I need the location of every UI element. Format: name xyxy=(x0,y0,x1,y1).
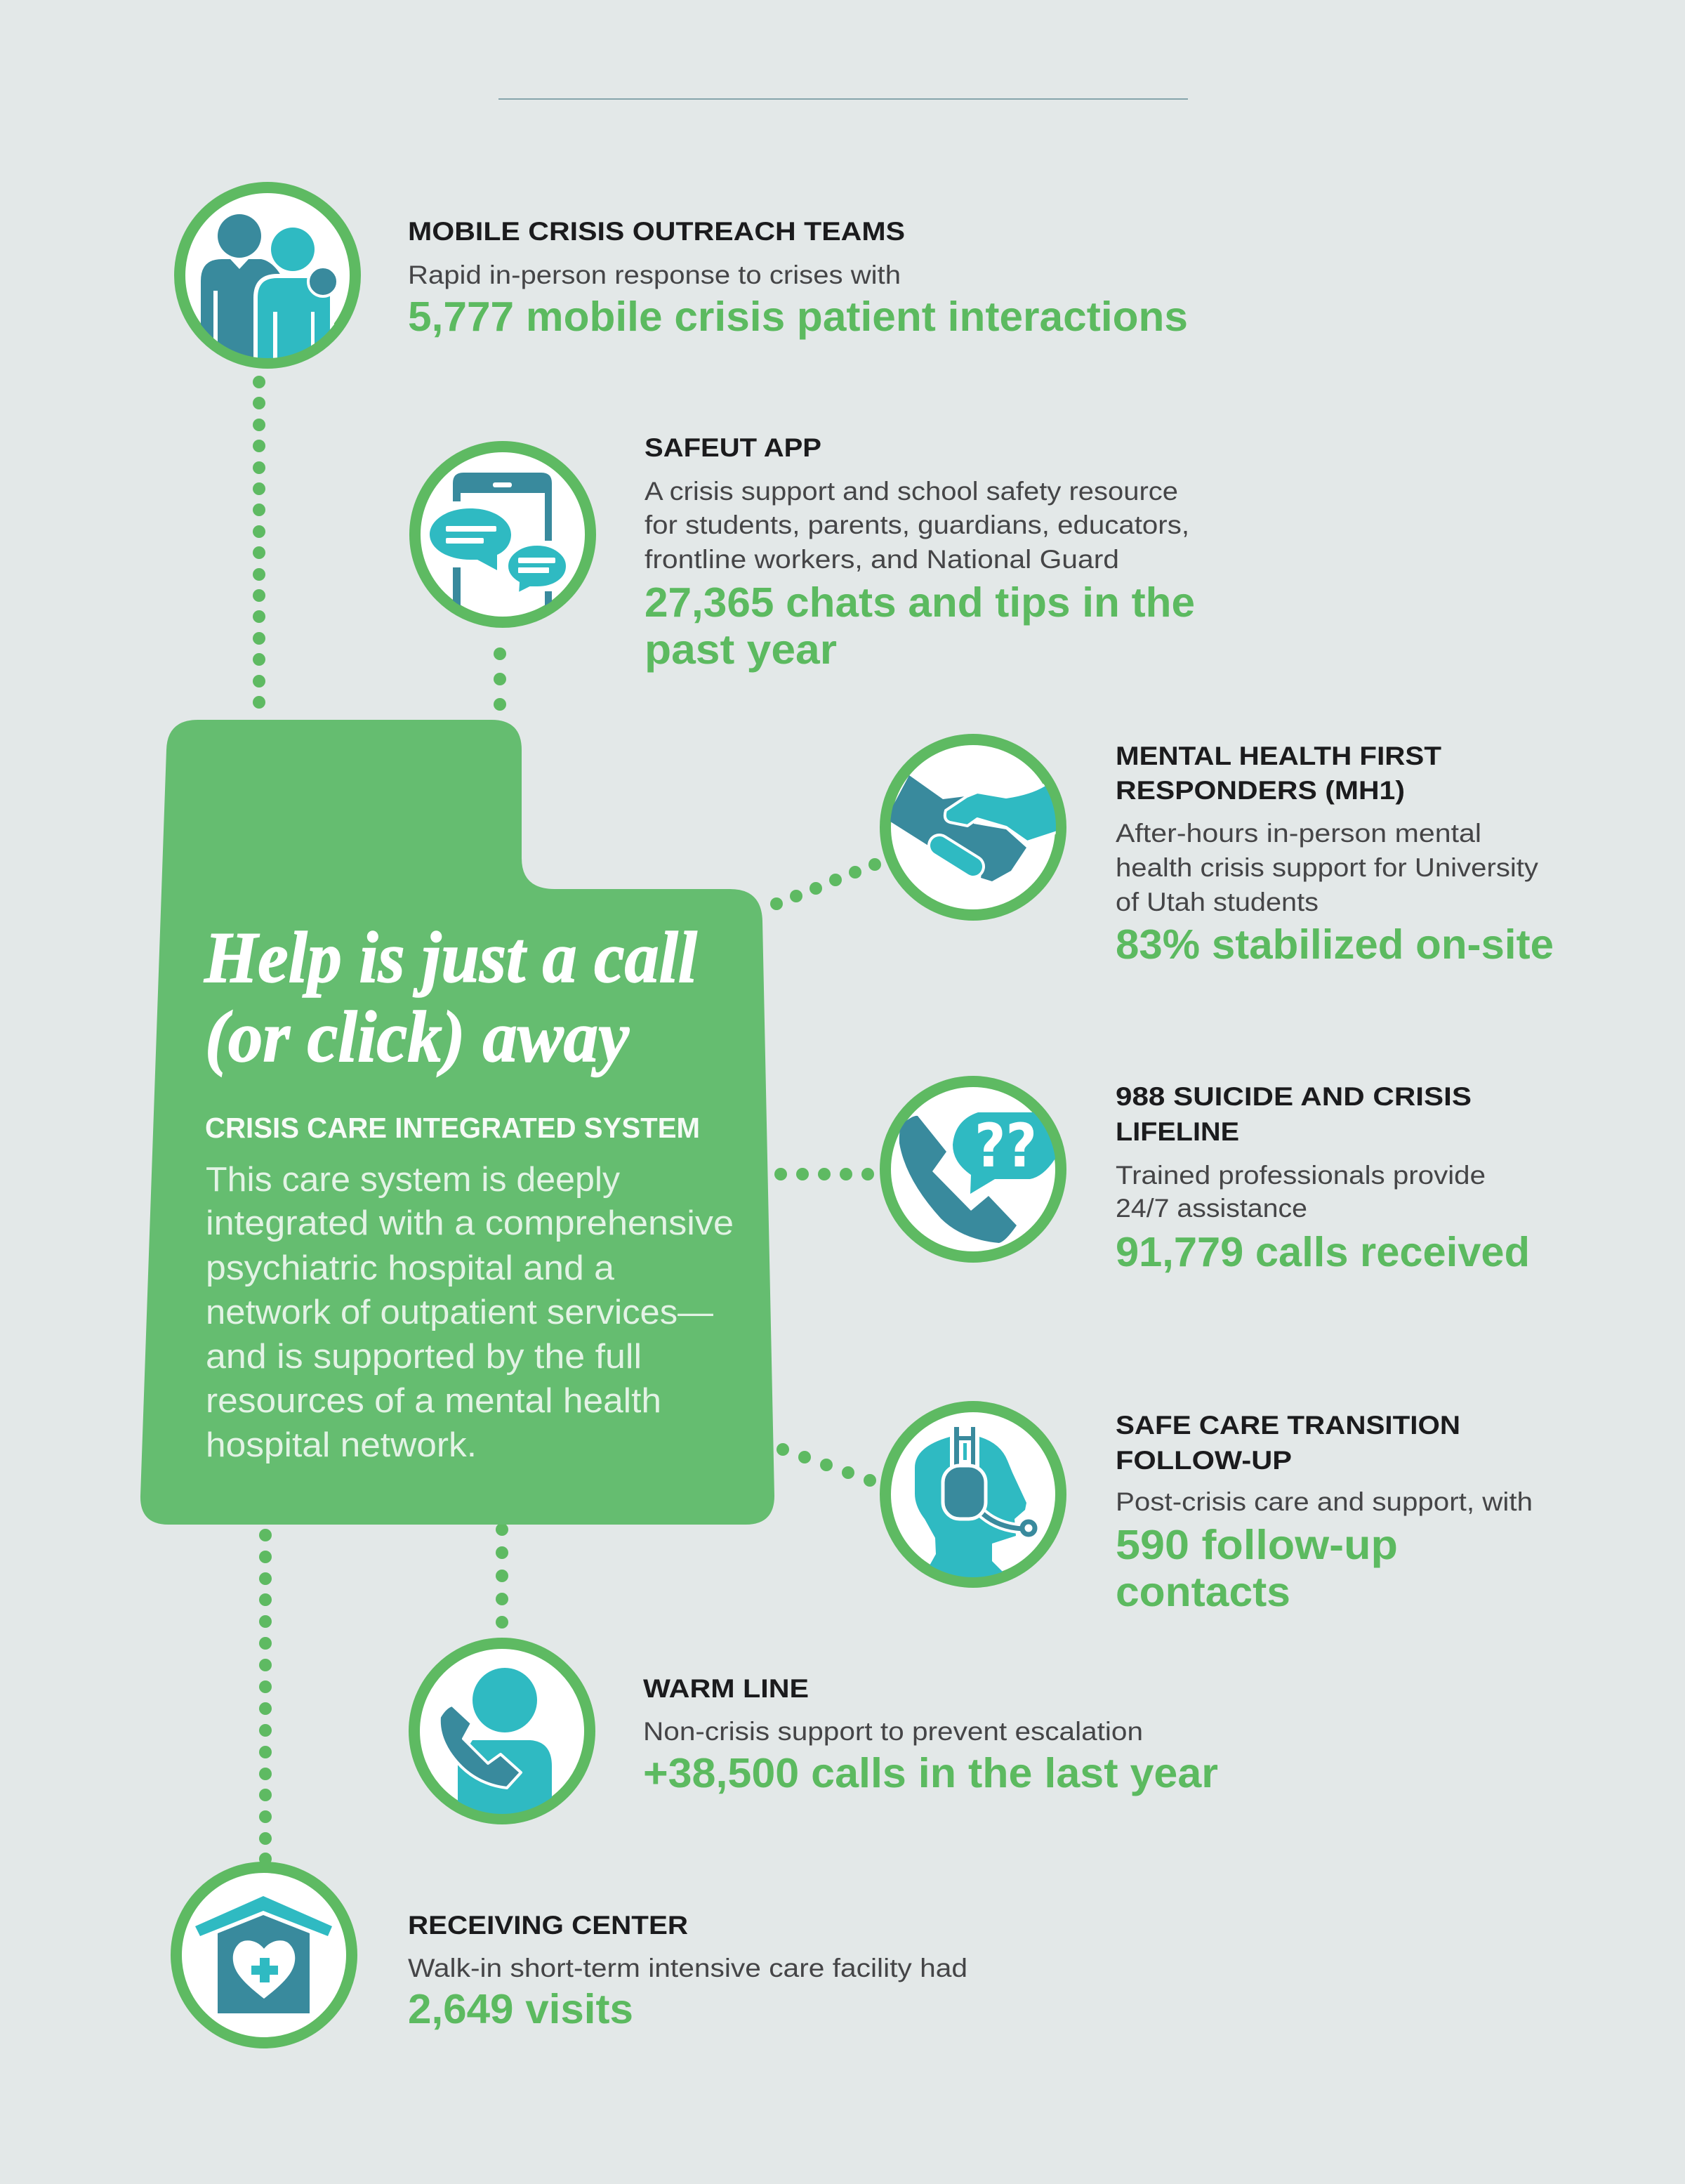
description: Trained professionals provide xyxy=(1116,1161,1486,1190)
icon: phone with chat bubbles xyxy=(415,447,590,624)
description: of Utah students xyxy=(1116,888,1319,916)
panel body text xyxy=(206,1161,734,1464)
description xyxy=(1116,1161,1486,1223)
statistic: contacts xyxy=(1116,1569,1290,1615)
connector: mobile crisis to panel xyxy=(253,376,265,709)
item: mobile crisis outreach teams xyxy=(180,188,1188,375)
item: mental health first responders xyxy=(885,739,1554,968)
panel body text: This care system is deeply xyxy=(206,1161,621,1199)
heading: MOBILE CRISIS OUTREACH TEAMS xyxy=(408,217,905,246)
connector: 988 lifeline to panel xyxy=(774,1168,874,1180)
panel body text: and is supported by the full xyxy=(206,1338,642,1376)
panel: Utah-shaped crisis care system xyxy=(140,720,774,1525)
statistic xyxy=(645,579,1195,673)
heading: LIFELINE xyxy=(1116,1117,1239,1146)
panel body text: resources of a mental health xyxy=(206,1382,661,1420)
panel body text: psychiatric hospital and a xyxy=(206,1249,615,1287)
item: safe care transition follow-up xyxy=(885,1407,1533,1615)
item: receiving center xyxy=(176,1867,967,2043)
item: warm line xyxy=(414,1643,1218,1826)
description: for students, parents, guardians, educators, xyxy=(645,511,1189,539)
heading: SAFEUT APP xyxy=(645,433,821,462)
heading: RESPONDERS (MH1) xyxy=(1116,776,1405,805)
heading: WARM LINE xyxy=(643,1674,809,1703)
connector: SafeUT to panel xyxy=(494,647,506,711)
description: Rapid in-person response to crises with xyxy=(408,261,901,289)
panel body text: network of outpatient services— xyxy=(206,1294,713,1331)
heading: SAFE CARE TRANSITION xyxy=(1116,1411,1460,1440)
infographic canvas xyxy=(140,98,1552,2048)
heading: MENTAL HEALTH FIRST xyxy=(1116,742,1441,770)
panel title: Help is just a call xyxy=(204,917,697,998)
description: 24/7 assistance xyxy=(1116,1194,1307,1223)
description: A crisis support and school safety resource xyxy=(645,477,1178,506)
icon: head with headset xyxy=(885,1407,1061,1582)
connector: follow-up to panel xyxy=(777,1443,876,1487)
statistic: 590 follow-up xyxy=(1116,1522,1398,1568)
panel body text: integrated with a comprehensive xyxy=(206,1204,734,1242)
statistic: 2,649 visits xyxy=(408,1986,633,2032)
statistic: 5,777 mobile crisis patient interactions xyxy=(408,294,1188,340)
description: After-hours in-person mental xyxy=(1116,819,1481,848)
icon: telephone with question bubble xyxy=(885,1081,1061,1257)
heading: FOLLOW-UP xyxy=(1116,1446,1292,1475)
connector: MH1 to panel xyxy=(770,858,881,910)
description xyxy=(1116,819,1539,916)
panel title: (or click) away xyxy=(205,996,630,1077)
statistic: past year xyxy=(645,626,837,673)
item: SafeUT app xyxy=(415,433,1195,673)
description: Post-crisis care and support, with xyxy=(1116,1487,1533,1516)
statistic: 27,365 chats and tips in the xyxy=(645,579,1195,626)
panel body text: hospital network. xyxy=(206,1426,477,1464)
description: health crisis support for University xyxy=(1116,853,1539,882)
connector: panel to receiving center xyxy=(259,1529,272,1865)
icon: telephone with question bubble: ?? xyxy=(974,1111,1037,1181)
statistic: +38,500 calls in the last year xyxy=(643,1750,1218,1796)
icon: family group xyxy=(180,188,355,375)
description: Non-crisis support to prevent escalation xyxy=(643,1717,1143,1746)
heading: RECEIVING CENTER xyxy=(408,1911,688,1940)
icon: person with telephone xyxy=(414,1643,590,1826)
statistic: 91,779 calls received xyxy=(1116,1229,1530,1275)
heading xyxy=(1116,742,1441,805)
panel background: Utah shape xyxy=(140,720,774,1525)
icon: handshake xyxy=(885,739,1064,915)
statistic: 83% stabilized on-site xyxy=(1116,921,1554,968)
statistic xyxy=(1116,1522,1398,1615)
panel subheading: CRISIS CARE INTEGRATED SYSTEM xyxy=(205,1112,700,1144)
item: 988 suicide and crisis lifeline xyxy=(885,1081,1530,1275)
heading xyxy=(1116,1411,1460,1475)
panel title xyxy=(204,917,697,1077)
description: frontline workers, and National Guard xyxy=(645,545,1119,574)
description xyxy=(645,477,1189,574)
heading xyxy=(1116,1082,1472,1146)
icon: house with heart xyxy=(176,1867,352,2043)
description: Walk-in short-term intensive care facility had xyxy=(408,1954,967,1982)
connector: panel to warm line xyxy=(496,1523,508,1629)
heading: 988 SUICIDE AND CRISIS xyxy=(1116,1082,1472,1111)
